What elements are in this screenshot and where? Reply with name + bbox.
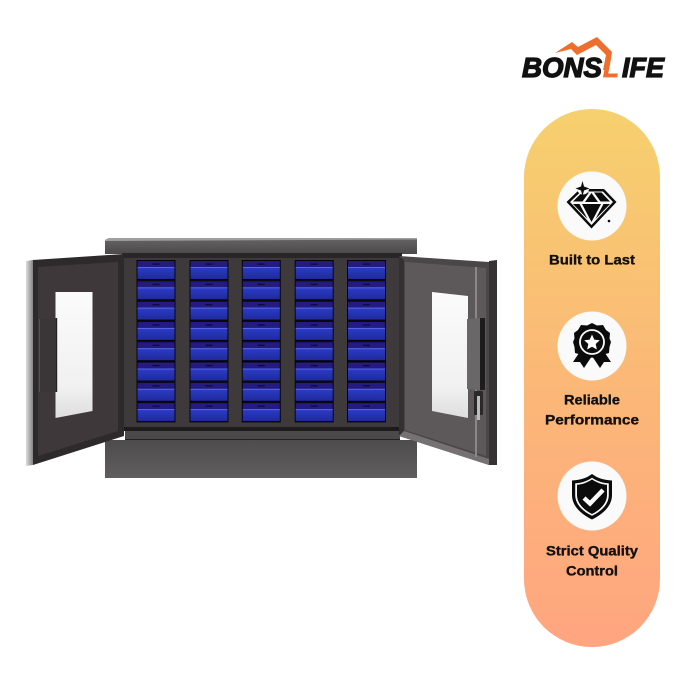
brand logo	[522, 37, 665, 83]
cabinet interior	[122, 253, 402, 431]
feature: reliable performance	[545, 312, 639, 428]
blue bin columns	[136, 260, 386, 422]
right door key lock	[474, 391, 483, 420]
label line 2: Control	[566, 562, 618, 578]
panel background pill	[524, 109, 660, 647]
label line 2: Performance	[545, 412, 639, 428]
cabinet product illustration	[26, 238, 497, 478]
icon: shield check	[558, 462, 626, 530]
logo wordmark: L: L	[603, 52, 619, 83]
left door handle	[39, 318, 57, 392]
cabinet top panel	[105, 238, 417, 254]
right door handle	[467, 318, 485, 390]
left open door	[26, 254, 124, 466]
cabinet lower shelf	[122, 427, 402, 440]
label: Built to Last	[549, 252, 635, 268]
logo wordmark: BONS: BONS	[522, 52, 602, 83]
bin column 2	[190, 260, 228, 422]
icon: diamond	[558, 172, 626, 240]
feature: strict quality control	[546, 462, 638, 578]
logo wordmark: IFE: IFE	[622, 52, 665, 83]
bin column 5	[347, 260, 386, 422]
label: Strict Quality	[546, 542, 638, 558]
label: Reliable	[564, 392, 620, 408]
left door window	[56, 292, 92, 418]
bin column 3	[242, 260, 281, 422]
cabinet base	[105, 440, 417, 478]
bin column 1	[136, 260, 176, 422]
icon: award rosette	[558, 312, 626, 380]
bin column 4	[295, 260, 334, 422]
right open door	[399, 256, 497, 465]
logo roof mark	[555, 37, 612, 70]
right door latch rod	[475, 267, 477, 457]
right door window	[432, 292, 468, 418]
feature panel	[524, 109, 660, 647]
feature: built to last	[549, 172, 635, 268]
